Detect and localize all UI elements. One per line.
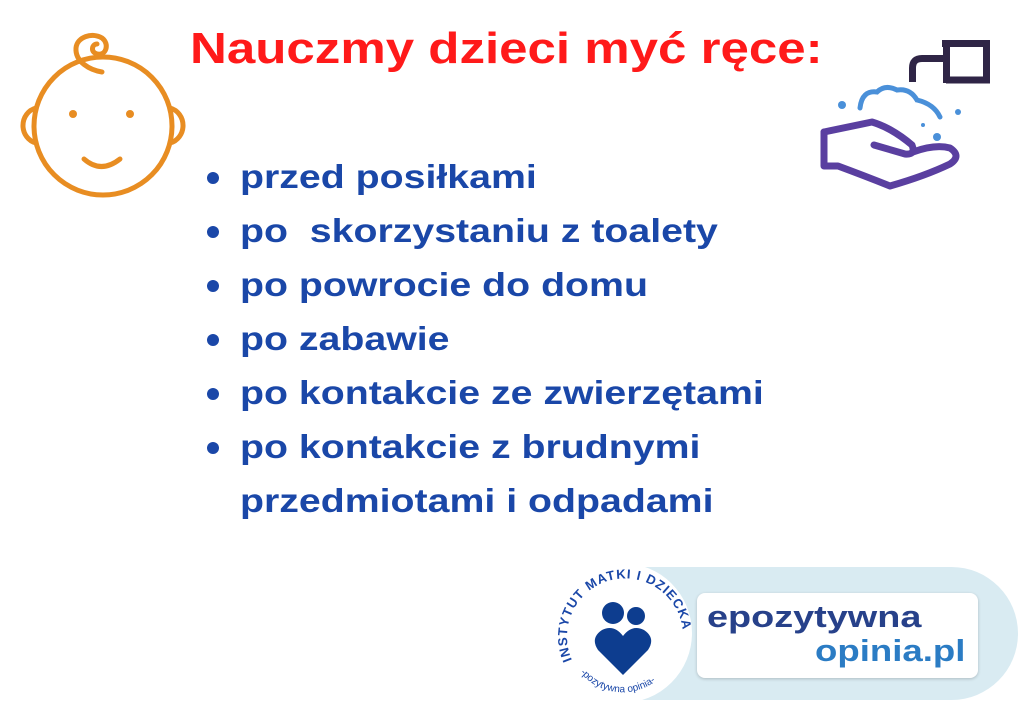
bullet list xyxy=(207,158,764,519)
bullet list: po kontakcie ze zwierzętami xyxy=(240,374,764,411)
logo badge: INSTYTUT MATKI I DZIECKA xyxy=(558,569,691,663)
logo xyxy=(558,567,1018,700)
logo text box: opinia.pl xyxy=(815,633,965,668)
logo background pill xyxy=(610,567,1018,700)
title: Nauczmy dzieci myć ręce: xyxy=(190,24,823,73)
bullet list: przedmiotami i odpadami xyxy=(240,482,713,519)
logo badge: -pozytywna opinia- xyxy=(582,670,654,694)
bullet list: po kontakcie z brudnymi xyxy=(240,428,700,465)
bullet list: przed posiłkami xyxy=(240,158,537,195)
icon: hand washing xyxy=(820,40,990,190)
bullet list: po powrocie do domu xyxy=(240,266,648,303)
bullet list: po skorzystaniu z toalety xyxy=(240,212,718,249)
logo text box xyxy=(697,593,978,678)
logo text box: epozytywna xyxy=(707,599,921,634)
bullet list: po zabawie xyxy=(240,320,449,357)
icon: baby face xyxy=(20,32,186,198)
